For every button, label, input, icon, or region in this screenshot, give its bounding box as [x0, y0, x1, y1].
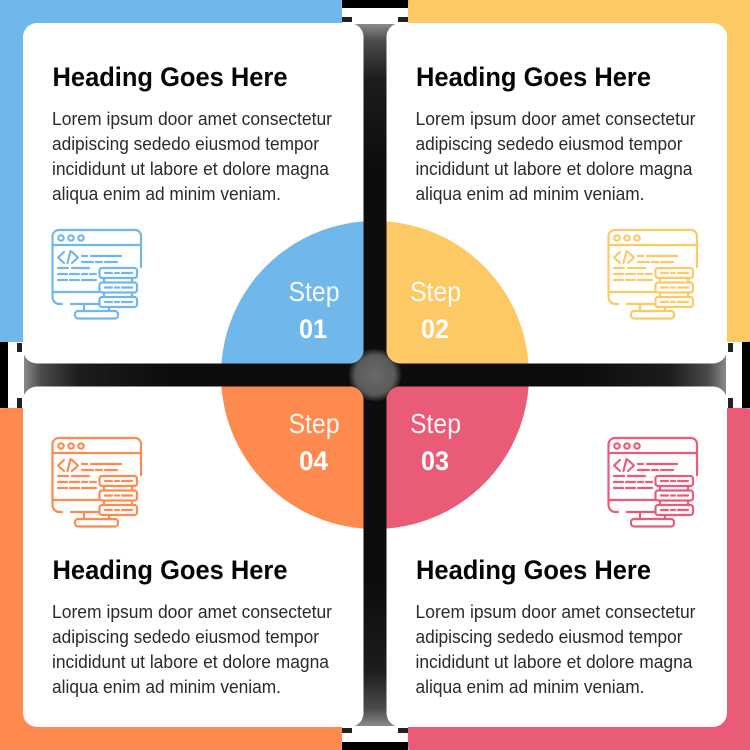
body text: Lorem ipsum door amet consectetur — [52, 109, 332, 129]
panel: step 02 — [386, 23, 727, 364]
panel: step 04 — [23, 386, 364, 727]
coloured corner: pink — [408, 408, 750, 750]
heading: Heading Goes Here — [52, 62, 288, 92]
circle quadrant — [221, 386, 364, 529]
coloured corner: orange — [0, 408, 342, 750]
coloured corner: yellow — [408, 0, 750, 342]
circle quadrant — [221, 221, 364, 364]
card background — [386, 23, 727, 364]
icon: code monitor — [608, 438, 697, 526]
step label — [288, 408, 340, 476]
body text: incididunt ut labore et dolore magna — [416, 652, 693, 672]
body text: aliqua enim ad minim veniam. — [52, 677, 281, 697]
heading: Heading Goes Here — [52, 555, 288, 585]
step label: 02 — [421, 314, 449, 344]
step label — [410, 408, 461, 476]
heading: Heading Goes Here — [416, 62, 651, 92]
step label: Step — [288, 276, 340, 307]
coloured corner: blue — [0, 0, 342, 342]
step label: 04 — [299, 446, 328, 476]
card background — [23, 386, 364, 727]
body text: adipiscing sededo eiusmod tempor — [416, 134, 682, 154]
step label: Step — [410, 276, 461, 307]
body text: adipiscing sededo eiusmod tempor — [52, 627, 319, 647]
body text: adipiscing sededo eiusmod tempor — [416, 627, 682, 647]
body text: incididunt ut labore et dolore magna — [52, 652, 330, 672]
body text — [52, 109, 332, 204]
step label — [410, 276, 461, 344]
body text: Lorem ipsum door amet consectetur — [416, 109, 696, 129]
body text — [52, 602, 332, 697]
card background — [386, 386, 727, 727]
step label: 01 — [299, 314, 327, 344]
heading: Heading Goes Here — [416, 555, 651, 585]
step label: Step — [410, 408, 461, 439]
body text: Lorem ipsum door amet consectetur — [52, 602, 332, 622]
body text — [416, 109, 696, 204]
panel: step 01 — [23, 23, 364, 364]
body text: Lorem ipsum door amet consectetur — [416, 602, 696, 622]
body text: adipiscing sededo eiusmod tempor — [52, 134, 319, 154]
circle quadrant — [386, 221, 529, 364]
step label: Step — [288, 408, 340, 439]
circle quadrant — [386, 386, 529, 529]
icon: code monitor — [608, 230, 697, 318]
panel: step 03 — [386, 386, 727, 727]
body text — [416, 602, 696, 697]
body text: incididunt ut labore et dolore magna — [52, 159, 330, 179]
step label: 03 — [421, 446, 449, 476]
card background — [23, 23, 364, 364]
icon: code monitor — [52, 230, 141, 318]
body text: incididunt ut labore et dolore magna — [416, 159, 693, 179]
icon: code monitor — [52, 438, 141, 526]
body text: aliqua enim ad minim veniam. — [416, 677, 644, 697]
step label — [288, 276, 340, 344]
body text: aliqua enim ad minim veniam. — [52, 184, 281, 204]
body text: aliqua enim ad minim veniam. — [416, 184, 644, 204]
